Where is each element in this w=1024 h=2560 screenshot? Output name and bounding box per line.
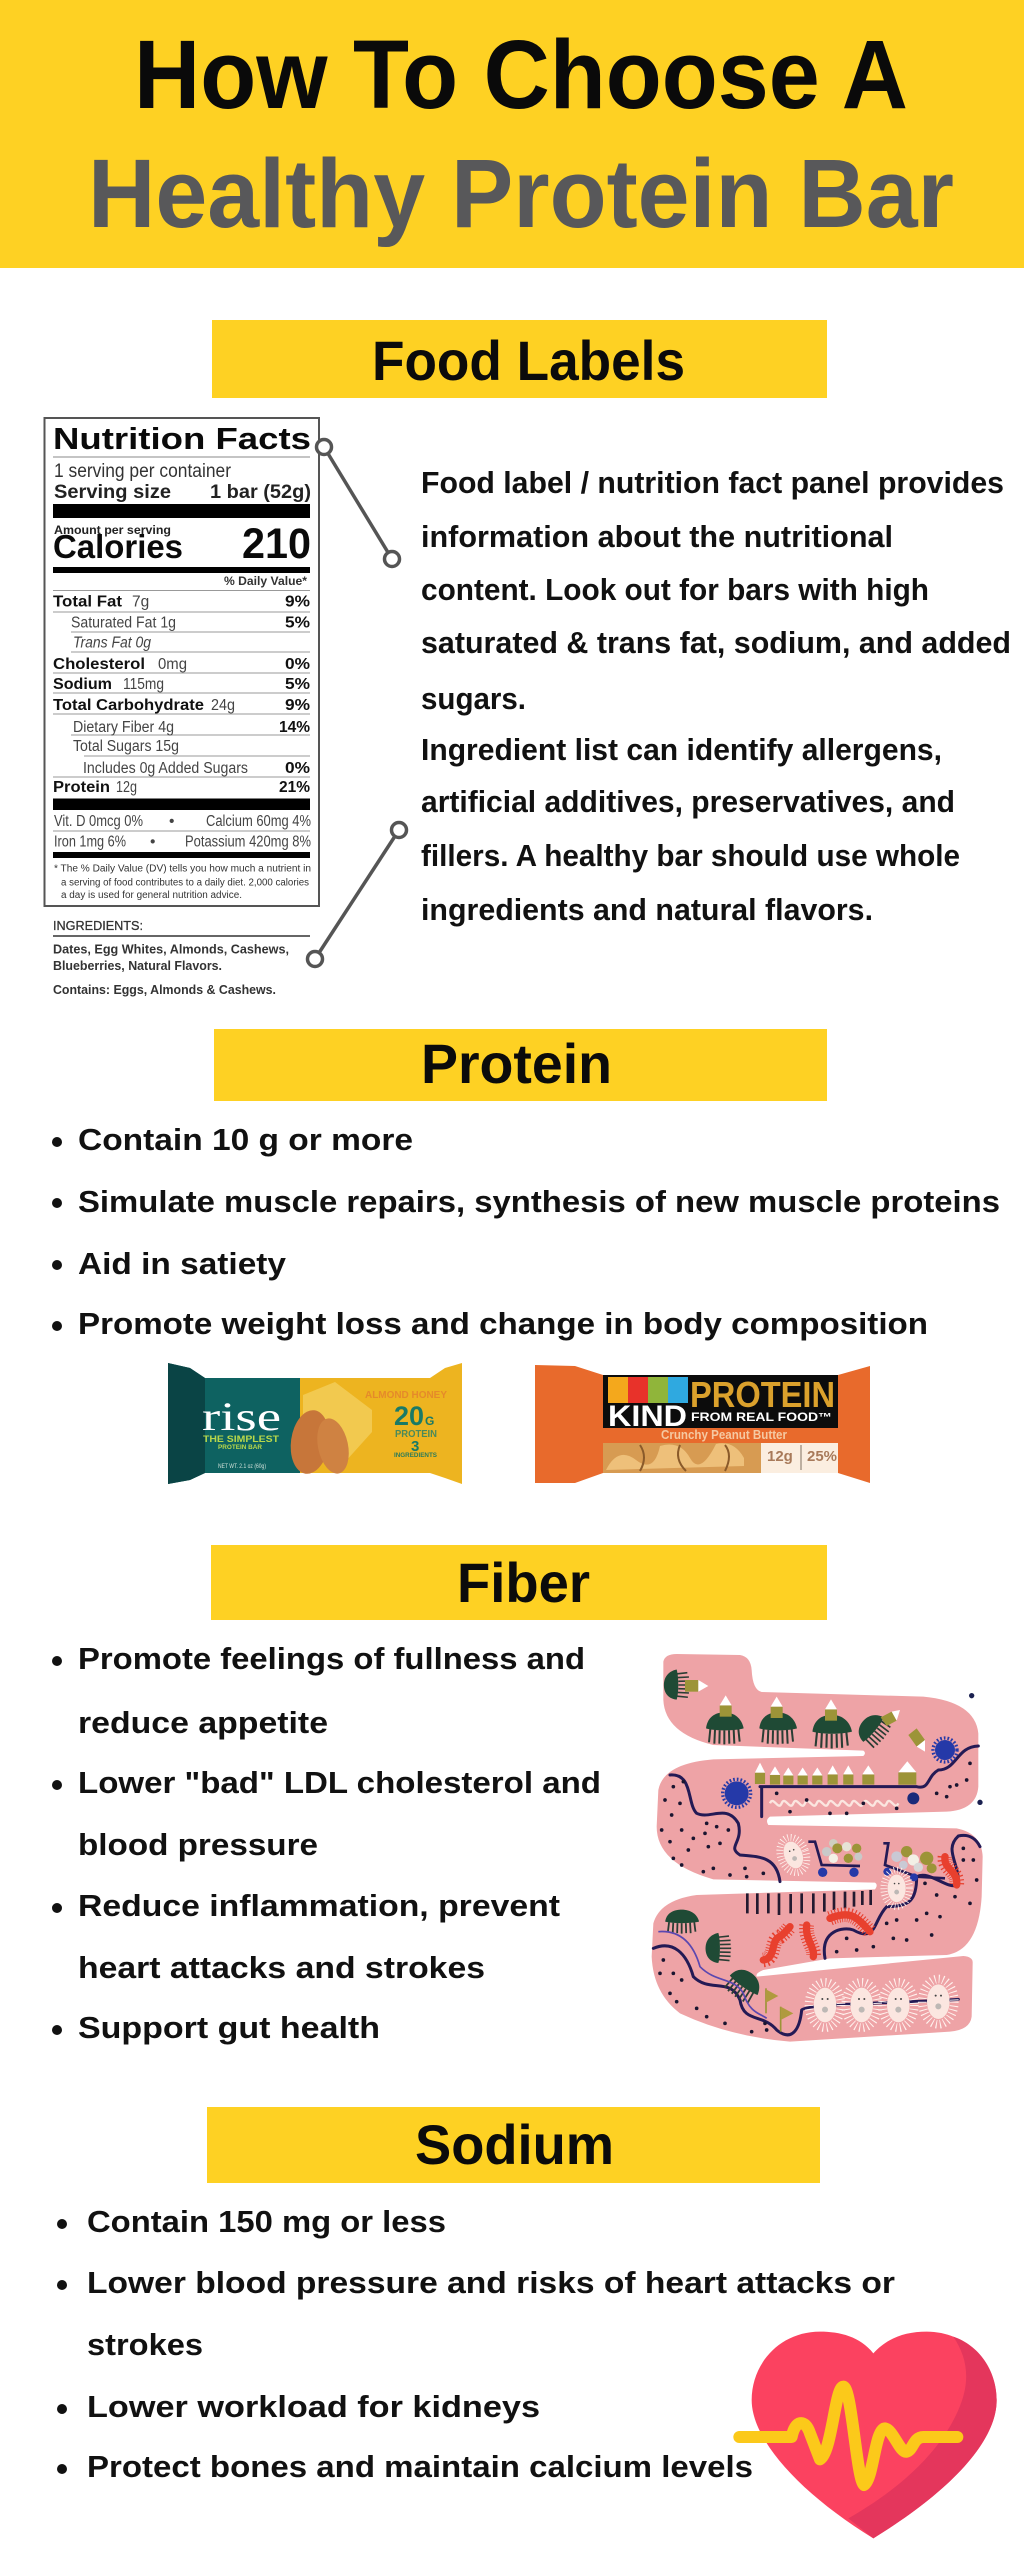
nutrient rows: 9%	[285, 594, 310, 610]
sodium bullet list: Contain 150 mg or less	[87, 2204, 446, 2239]
food label explanation text: information about the nutritional	[421, 519, 893, 554]
fiber bullet list: Promote feelings of fullness and	[78, 1641, 585, 1676]
heading: sodium	[207, 2107, 820, 2183]
image: kind protein bar: FROM REAL FOOD™	[691, 1412, 832, 1424]
fiber bullet list: Lower "bad" LDL cholesterol and	[78, 1765, 601, 1800]
sodium bullet list: Lower blood pressure and risks of heart attacks or	[87, 2265, 895, 2300]
fiber bullet list: Support gut health	[78, 2010, 380, 2045]
serving information	[53, 457, 311, 518]
calories: Calories	[53, 528, 183, 565]
food label explanation text: ingredients and natural flavors.	[421, 892, 873, 927]
nutrient rows: 14%	[279, 719, 310, 736]
connector: nutrition panel to text	[316, 440, 400, 566]
heading: food labels: Food Labels	[372, 329, 685, 392]
food label explanation text: content. Look out for bars with high	[421, 572, 929, 607]
nutrient rows: 9%	[285, 697, 310, 714]
connector: ingredients to text	[308, 822, 406, 966]
sodium bullet list	[57, 2204, 895, 2484]
food label explanation text: artificial additives, preservatives, and	[421, 784, 955, 819]
green microbes with food	[664, 1670, 925, 1752]
fiber bullet list: Reduce inflammation, prevent	[78, 1888, 560, 1923]
kind colour blocks	[608, 1377, 688, 1403]
title banner: Healthy Protein Bar	[88, 139, 954, 248]
nutrient rows: Sodium	[53, 676, 112, 693]
footnote: * The % Daily Value (DV) tells you how much a nutrient in	[54, 864, 311, 874]
panel: nutrition facts label	[44, 418, 319, 906]
image: rise protein bar: ALMOND HONEY	[365, 1390, 447, 1401]
title banner: How To Choose A	[134, 20, 908, 129]
image: rise protein bar: INGREDIENTS	[394, 1453, 437, 1459]
footnote: a serving of food contributes to a daily diet. 2,000 calories	[61, 878, 309, 888]
black villi bars	[747, 1890, 871, 1915]
green microbes at lower bowel	[665, 1910, 766, 2007]
image: rise protein bar	[168, 1363, 462, 1484]
nutrient rows: Saturated Fat 1g	[71, 614, 176, 632]
red harmful worms	[763, 1857, 957, 1960]
serving information: Serving size	[54, 482, 171, 503]
food label explanation text: sugars.	[421, 681, 526, 716]
ingredients list: Dates, Egg Whites, Almonds, Cashews,	[53, 942, 289, 956]
image: rise protein bar: G	[425, 1414, 434, 1428]
small pink squiggle	[770, 1801, 898, 1806]
vitamins and minerals: Vit. D 0mcg 0%	[54, 813, 143, 830]
fiber bullet list: heart attacks and strokes	[78, 1950, 485, 1985]
food label explanation text: fillers. A healthy bar should use whole	[421, 838, 960, 873]
dark dots	[660, 1763, 977, 2032]
image: kind protein bar: Crunchy Peanut Butter	[661, 1428, 787, 1442]
protein bullet list: Promote weight loss and change in body composition	[78, 1306, 928, 1341]
image: kind protein bar: KIND	[608, 1400, 687, 1433]
calories: % Daily Value*	[224, 576, 308, 588]
rise bar wordmark: rise	[202, 1394, 281, 1439]
calories	[53, 520, 311, 588]
illustration: gut and microbes	[652, 1654, 983, 2042]
white probiotic microbes	[775, 1834, 954, 2028]
nutrient rows: 21%	[279, 779, 310, 796]
heading: fiber	[211, 1545, 827, 1620]
nutrient rows: 115mg	[123, 676, 164, 693]
food label explanation text: saturated & trans fat, sodium, and added	[421, 625, 1011, 660]
fiber bullet list: blood pressure	[78, 1827, 318, 1862]
footnote	[54, 864, 311, 901]
nutrient rows: Total Fat	[53, 594, 122, 610]
food label explanation text: Ingredient list can identify allergens,	[421, 732, 942, 767]
nutrition facts heading: Nutrition Facts	[53, 421, 311, 456]
ingredients list	[53, 918, 310, 997]
nutrient rows: 7g	[132, 594, 149, 610]
heading: protein	[214, 1029, 827, 1101]
nutrient rows: 0%	[285, 656, 310, 673]
protein bullet list	[52, 1122, 1000, 1341]
image: rise protein bar: 3	[411, 1438, 419, 1455]
serving information: 1 bar (52g)	[210, 482, 311, 503]
serving information: 1 serving per container	[54, 461, 232, 482]
image: rise protein bar: PROTEIN	[395, 1429, 437, 1440]
sodium bullet list: Protect bones and maintain calcium levels	[87, 2449, 753, 2484]
ingredients list: Contains: Eggs, Almonds & Cashews.	[53, 983, 276, 997]
nutrient rows: Includes 0g Added Sugars	[83, 760, 248, 777]
nutrient rows: Trans Fat 0g	[73, 634, 151, 652]
heading: fiber: Fiber	[457, 1551, 590, 1614]
icon: heart with pulse line	[739, 2332, 997, 2538]
image: rise protein bar: NET WT. 2.1 oz (60g)	[218, 1464, 266, 1470]
heading: protein: Protein	[421, 1032, 612, 1095]
image: rise protein bar: PROTEIN BAR	[218, 1445, 263, 1451]
image: kind protein bar	[535, 1365, 870, 1483]
nutrient rows: 24g	[211, 697, 235, 714]
vitamins and minerals: •	[150, 834, 155, 850]
olive flags	[766, 1988, 793, 2032]
vitamins and minerals: Potassium 420mg 8%	[185, 834, 311, 850]
image: kind protein bar: 12g	[767, 1448, 793, 1465]
nutrient rows: Total Sugars 15g	[73, 738, 179, 755]
purple channel	[658, 1932, 767, 2018]
footnote: a day is used for general nutrition advice.	[61, 890, 242, 901]
heading: food labels	[212, 320, 827, 398]
protein bullet list: Aid in satiety	[78, 1246, 287, 1281]
nutrient rows: 5%	[285, 614, 310, 632]
nutrient rows: 0%	[285, 760, 310, 777]
nutrient rows: 5%	[285, 676, 310, 693]
vitamins and minerals: Calcium 60mg 4%	[206, 813, 311, 830]
image: kind protein bar: PROTEIN	[690, 1374, 835, 1415]
vitamins and minerals: •	[169, 813, 174, 830]
fiber bullet list	[52, 1641, 601, 2045]
nutrient rows: Protein	[53, 779, 110, 796]
heading: sodium: Sodium	[415, 2113, 614, 2176]
gut lining wavy lines	[653, 1746, 980, 2035]
title banner	[0, 0, 1024, 268]
image: rise protein bar: 20	[394, 1401, 424, 1431]
image: kind protein bar: 25%	[807, 1448, 837, 1465]
protein bullet list: Simulate muscle repairs, synthesis of new muscle proteins	[78, 1184, 1000, 1219]
nutrient rows: Dietary Fiber 4g	[73, 719, 174, 736]
shopping carts	[808, 1839, 945, 1881]
ingredients list: Blueberries, Natural Flavors.	[53, 959, 222, 973]
protein bullet list: Contain 10 g or more	[78, 1122, 413, 1157]
nutrient rows	[53, 590, 310, 831]
nutrient rows: 0mg	[158, 656, 187, 673]
calories: Amount per serving	[54, 523, 171, 537]
vitamins and minerals: Iron 1mg 6%	[54, 834, 126, 850]
vitamins and minerals	[53, 813, 311, 858]
sodium bullet list: strokes	[87, 2327, 203, 2362]
absorbed food row	[755, 1761, 916, 1785]
food label explanation text: Food label / nutrition fact panel provides	[421, 465, 1004, 500]
image: rise protein bar: THE SIMPLEST	[203, 1434, 279, 1445]
nutrient rows: Cholesterol	[53, 656, 145, 673]
ingredients list: INGREDIENTS:	[53, 918, 143, 933]
food label explanation text	[421, 465, 1011, 927]
calories: 210	[242, 520, 311, 568]
blue enzymes	[723, 1738, 957, 1807]
nutrient rows: 12g	[116, 779, 137, 796]
fiber bullet list: reduce appetite	[78, 1705, 328, 1740]
sodium bullet list: Lower workload for kidneys	[87, 2389, 540, 2424]
nutrient rows: Total Carbohydrate	[53, 697, 204, 714]
